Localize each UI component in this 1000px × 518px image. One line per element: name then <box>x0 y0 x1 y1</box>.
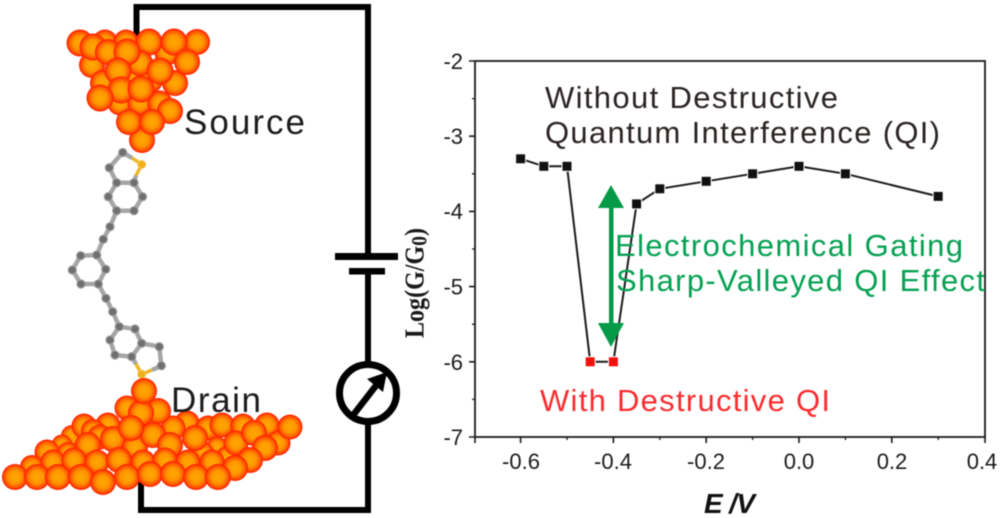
source electrode gold cluster <box>66 28 210 153</box>
x axis tick labels: 0.2 <box>877 449 907 474</box>
label: Drain: Drain <box>171 381 261 420</box>
annotation: without destructive QI: Without Destructive <box>545 80 838 115</box>
conductance line chart <box>400 49 997 518</box>
data line <box>521 159 938 362</box>
y axis title: 0 <box>406 236 432 246</box>
drain electrode gold cluster <box>2 378 302 495</box>
battery symbol <box>335 253 398 274</box>
annotation: without destructive QI <box>545 80 940 150</box>
y axis tick labels: -4 <box>443 199 463 224</box>
y axis tick labels: -5 <box>443 274 463 300</box>
data markers: with destructive QI <box>586 357 618 366</box>
x axis tick labels <box>502 449 997 474</box>
y axis tick labels: -2 <box>443 49 463 74</box>
annotation: without destructive QI: Quantum Interference (QI) <box>545 115 940 150</box>
annotation: electrochemical gating <box>615 228 985 298</box>
x axis tick labels: -0.2 <box>687 449 725 474</box>
y axis tick labels: -6 <box>443 350 463 375</box>
x axis tick labels: -0.6 <box>502 449 540 474</box>
x axis tick labels: 0.0 <box>784 449 814 474</box>
y axis tick labels: -3 <box>443 124 463 149</box>
y axis tick labels <box>443 49 463 450</box>
x axis tick labels: -0.4 <box>594 449 632 474</box>
molecule: bonds and atoms <box>68 148 165 378</box>
data markers: without destructive QI <box>516 154 943 208</box>
y axis tick labels: -7 <box>443 425 463 450</box>
annotation: with destructive QI: With Destructive QI <box>540 383 830 418</box>
annotation: electrochemical gating: Electrochemical Gating <box>615 228 963 263</box>
y axis title: ) <box>400 228 430 236</box>
annotation: electrochemical gating: Sharp-Valleyed QI Effect <box>616 263 985 298</box>
green double-headed arrow <box>598 185 624 347</box>
ammeter icon <box>340 364 396 422</box>
chart frame and axis ticks <box>469 61 985 443</box>
x axis tick labels: 0.4 <box>967 449 997 474</box>
label: Source: Source <box>184 103 305 142</box>
circuit wiring <box>136 7 368 510</box>
y axis title: Log(G/G <box>400 234 430 338</box>
